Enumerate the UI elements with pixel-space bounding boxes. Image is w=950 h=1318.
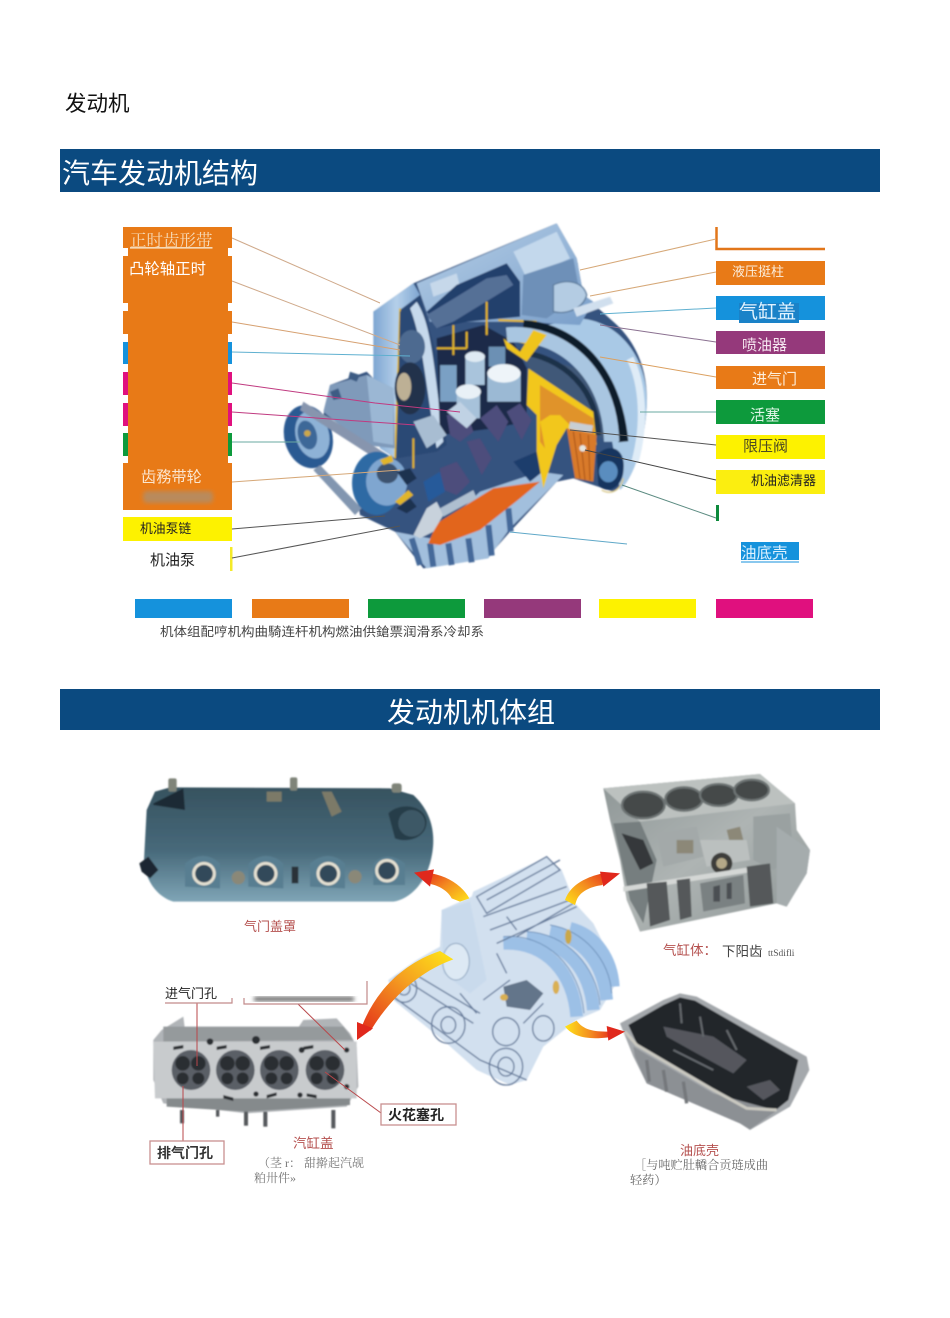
caption: oil pan: 油底壳	[680, 1143, 719, 1158]
label: blurred exhaust bracket	[244, 981, 367, 1004]
heading bar: engine structure	[60, 149, 880, 192]
caption: cylinder block: 下阳齿	[722, 944, 762, 959]
right label column: 喷油器	[742, 337, 787, 354]
colour legend	[135, 599, 813, 639]
right label column: 油底壳	[741, 544, 788, 562]
caption: cylinder head: 汽缸盖	[293, 1135, 334, 1151]
caption: cylinder head	[254, 1135, 364, 1185]
label: exhaust port	[150, 1141, 224, 1164]
caption: cylinder block: 气缸体：	[663, 942, 717, 958]
right label column: 限压阀	[743, 438, 788, 455]
right label column: 液压挺柱	[732, 264, 784, 279]
label: intake port: 进气门孔	[165, 986, 217, 1001]
caption: oil pan: 轻药）	[630, 1173, 667, 1187]
caption: cylinder block: ttSdifli	[768, 948, 795, 959]
right label column: 活塞	[750, 406, 780, 424]
caption: oil pan: ［与吨贮肚轎合贡琏成曲	[634, 1157, 768, 1172]
photo: cylinder block	[603, 774, 810, 932]
left label column: 凸轮轴正时	[129, 260, 206, 278]
caption: cylinder head: 粕卅件»	[254, 1170, 296, 1185]
timing system label blocks	[123, 227, 232, 510]
heading bar: engine structure: 汽车发动机结构	[62, 158, 258, 189]
caption: cylinder head: （茎 r： 甜擀起汽觇	[258, 1155, 364, 1170]
left label column: 齿務带轮	[141, 469, 202, 486]
label: intake port	[165, 986, 232, 1003]
colour legend: 机体组配哼机构曲騎连杆机构燃油供鎗票润滑系冷却系	[160, 624, 484, 639]
label: oil pump	[150, 547, 232, 571]
cutaway engine illustration	[277, 223, 647, 568]
photo: oil pan	[620, 993, 809, 1130]
label: exhaust port: 排气门孔	[157, 1145, 213, 1161]
arrow: to cylinder block	[565, 872, 620, 905]
heading bar: engine block group: 发动机机体组	[387, 697, 555, 728]
label: spark plug hole	[381, 1104, 456, 1125]
label: spark plug hole: 火花塞孔	[388, 1107, 444, 1123]
central engine line drawing	[388, 857, 618, 1085]
cylinder head callouts	[183, 1003, 381, 1141]
yellow label: oil pump chain	[123, 517, 232, 541]
arrow: to cylinder head	[357, 951, 453, 1040]
left label column: 正时齿形带	[130, 231, 212, 250]
caption: valve cover: 气门盖罩	[244, 919, 296, 934]
caption: cylinder block	[663, 942, 795, 959]
heading bar: engine block group	[60, 689, 880, 730]
left label column	[123, 227, 232, 571]
right label column: 机油滤清器	[751, 473, 816, 488]
arrow: to oil pan	[565, 1021, 625, 1041]
right label column	[716, 227, 825, 562]
photo: valve cover	[139, 777, 433, 902]
arrow: to valve cover	[414, 869, 469, 902]
label: oil pump: 机油泵	[150, 552, 195, 569]
right label column: 气缸盖	[739, 301, 796, 323]
yellow label: oil pump chain: 机油泵链	[140, 521, 191, 536]
right label column: 进气门	[752, 371, 797, 388]
leader lines	[232, 238, 716, 558]
photo: cylinder head	[153, 1017, 358, 1128]
page title: 发动机	[65, 92, 130, 116]
caption: oil pan	[630, 1143, 768, 1187]
